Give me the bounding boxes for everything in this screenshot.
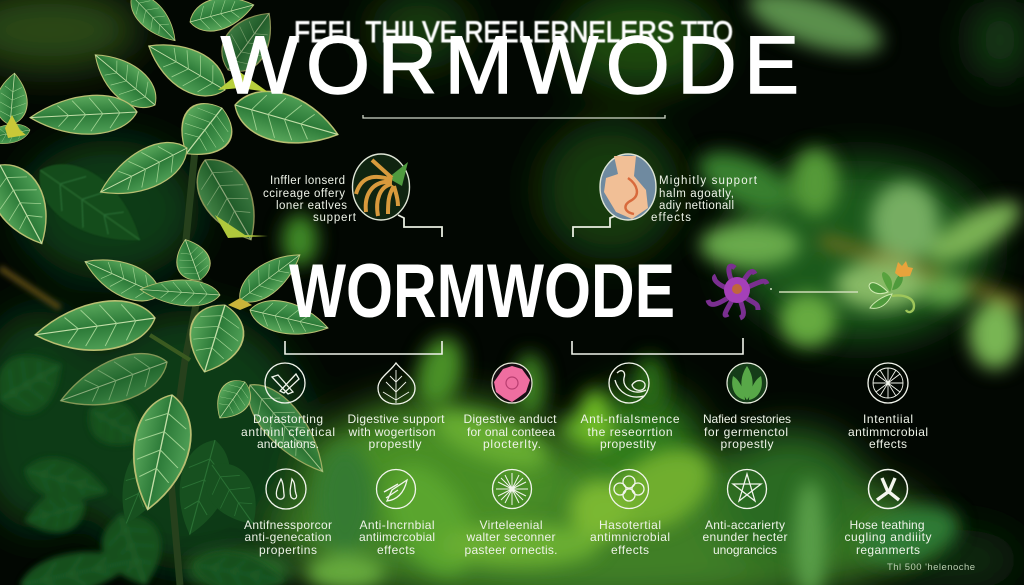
benefit: col 3 row 1: plocterlty.: [483, 437, 541, 451]
benefit: col 5 row 2: Anti-accarierty: [705, 518, 785, 532]
benefit: col 3 row 1: Digestive anduct: [464, 412, 557, 426]
benefit: col 6 row 1: Intentiial: [863, 412, 913, 426]
icon: green leaves: [727, 363, 767, 403]
icon: woven sphere: [868, 363, 908, 403]
benefit: col 2 row 2: [359, 470, 435, 557]
icon: veined drop: [378, 363, 415, 404]
icon: crossed tools: [265, 363, 305, 403]
benefit: col 4 row 2: Hasotertial: [599, 518, 661, 532]
connector line: [770, 288, 858, 292]
text: [651, 175, 758, 224]
overlay title: FEEL THII VE REELERNELERS TTO: [294, 16, 733, 49]
benefit: col 6 row 2: reganmerts: [856, 543, 920, 557]
central heading: WORMWODE: [289, 249, 675, 334]
benefit: col 4 row 2: antimnicrobial: [590, 530, 670, 544]
icon: pink rose: [492, 363, 532, 403]
benefit: col 5 row 1: propestly: [720, 437, 774, 451]
benefit: col 6 row 1: effects: [869, 437, 907, 451]
text: loner eatlves: [276, 200, 347, 212]
benefit: col 5 row 2: unograncics: [713, 543, 777, 557]
benefit: col 3 row 2: [464, 470, 558, 557]
text: ccireage offery: [263, 188, 345, 200]
bracket: left: [285, 341, 442, 354]
benefit: col 4 row 2: effects: [611, 543, 649, 557]
benefit: col 2 row 1: [348, 363, 445, 451]
plant: left foliage: [0, 0, 345, 585]
benefit: col 4 row 1: [580, 363, 680, 451]
benefit row one: [241, 363, 928, 451]
icon: swirl: [609, 363, 649, 403]
main title: WORMWODE: [221, 20, 799, 111]
benefit: col 2 row 2: Anti-Incrnbial: [360, 518, 434, 532]
icon: human figure: [600, 154, 656, 220]
benefit: col 5 row 1: [703, 363, 791, 451]
icon: crossed forms: [868, 470, 908, 508]
benefit: col 4 row 1: the reseorrtion: [588, 425, 672, 439]
benefit: col 5 row 2: [702, 470, 788, 557]
benefit: col 1 row 2: Antifnessporcor: [244, 518, 332, 532]
text: adiy nettionall: [659, 200, 734, 212]
benefit: col 4 row 1: Anti-nfiaIsmence: [580, 412, 680, 426]
benefit: col 5 row 1: for germenctol: [704, 425, 788, 439]
benefit: col 1 row 1: [241, 363, 335, 451]
icon: purple flower: [708, 266, 767, 318]
benefit: col 5 row 1: Nafied srestories: [703, 412, 791, 426]
icon: green sprout: [869, 261, 914, 312]
icon: linked rings: [610, 470, 648, 508]
bracket: right: [572, 338, 743, 354]
benefit: col 1 row 2: propertins: [259, 543, 317, 557]
benefit: col 1 row 2: anti-genecation: [244, 530, 332, 544]
benefit: col 1 row 2: [244, 469, 332, 557]
callout: right body benefit: [600, 154, 758, 224]
icon: root bundle: [352, 154, 410, 220]
text: halm agoatly,: [659, 188, 734, 200]
benefit: col 2 row 2: antiimcrcobial: [359, 530, 435, 544]
buds: [5, 72, 268, 310]
benefit: col 3 row 1: for onal conteea: [467, 425, 555, 439]
text: [263, 175, 357, 224]
benefit: col 1 row 1: Dorastorting: [253, 412, 323, 426]
connector: right: [573, 216, 615, 237]
benefit: col 3 row 2: pasteer ornectis.: [464, 543, 558, 557]
benefit: col 3 row 2: walter seconner: [466, 530, 556, 544]
benefit: col 2 row 1: Digestive support: [348, 412, 445, 426]
benefit: col 6 row 1: antimmcrobial: [848, 425, 928, 439]
benefit: col 4 row 2: [590, 470, 670, 557]
stems: [0, 105, 215, 585]
benefit: col 6 row 2: cugling andiiity: [844, 530, 932, 544]
text: Inffler lonserd: [270, 175, 345, 187]
icon: twin loops: [266, 469, 306, 509]
text: suppert: [313, 212, 357, 224]
benefit: col 4 row 1: propestity: [600, 437, 656, 451]
text: Mighitly support: [659, 175, 758, 187]
text: effects: [651, 212, 691, 224]
benefit: col 1 row 1: andcations.: [257, 437, 319, 451]
connector: left: [398, 215, 442, 237]
icon: leaf spray: [376, 470, 416, 508]
benefit: col 1 row 1: antlninl cfertical: [241, 425, 335, 439]
bright foreground leaves: [123, 0, 185, 49]
title underline: [363, 115, 665, 118]
icon: starburst: [492, 470, 532, 508]
benefit: col 2 row 1: propestly: [368, 437, 422, 451]
benefit: col 6 row 2: [844, 470, 932, 557]
benefit: col 6 row 1: [848, 363, 928, 451]
benefit: col 2 row 1: with wogertison: [348, 425, 436, 439]
benefit: col 3 row 1: [464, 363, 557, 451]
dim background leaves: [0, 339, 287, 585]
benefit: col 6 row 2: Hose teathing: [850, 518, 924, 532]
callout: left root benefit: [263, 154, 410, 224]
benefit: col 3 row 2: Virteleenial: [480, 518, 542, 532]
benefit: col 5 row 2: enunder hecter: [702, 530, 788, 544]
benefit: col 2 row 2: effects: [377, 543, 415, 557]
benefit row two: [244, 469, 932, 557]
footnote: Thl 500 'helenoche: [887, 562, 975, 573]
icon: star: [728, 470, 766, 508]
